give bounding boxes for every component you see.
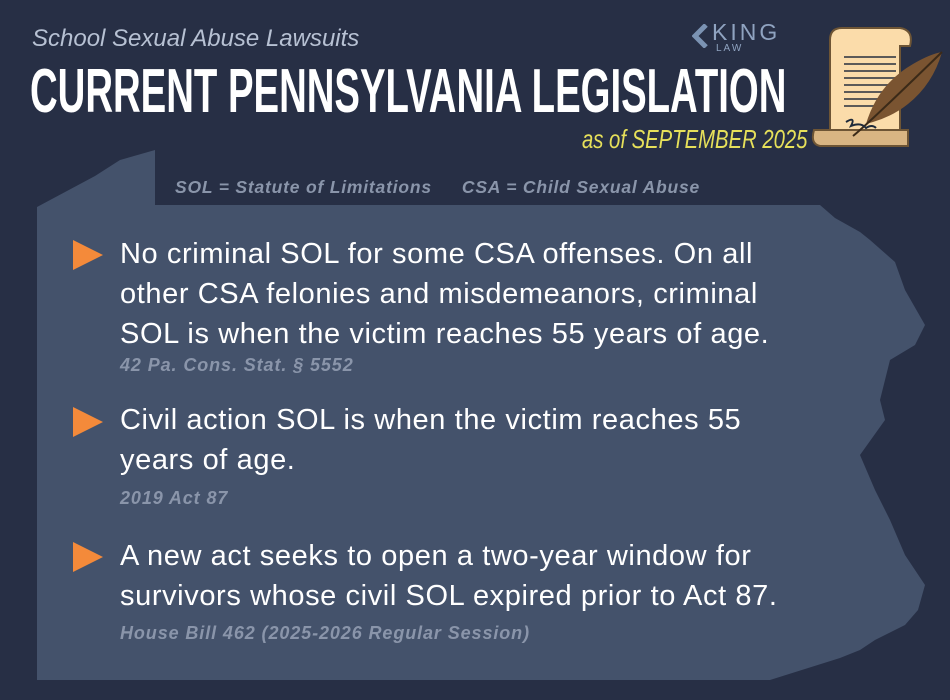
- item 2: [73, 404, 741, 508]
- logo: King Law: LAW: [716, 43, 743, 54]
- text 3: [120, 540, 778, 612]
- text 3: survivors whose civil SOL expired prior to Act 87.: [120, 580, 778, 612]
- source 3: House Bill 462 (2025-2026 Regular Session): [120, 623, 530, 643]
- text 2: years of age.: [120, 444, 295, 476]
- item 1: [73, 238, 769, 375]
- icon: orange arrow: [73, 542, 103, 572]
- text 3: A new act seeks to open a two-year window for: [120, 540, 751, 572]
- text 2: Civil action SOL is when the victim reaches 55: [120, 404, 741, 436]
- text 1: other CSA felonies and misdemeanors, criminal: [120, 278, 758, 310]
- icon: scroll with quill: [812, 27, 942, 147]
- source 1: 42 Pa. Cons. Stat. § 5552: [120, 355, 354, 375]
- text 1: No criminal SOL for some CSA offenses. On all: [120, 238, 753, 270]
- text 2: [120, 404, 741, 476]
- text 1: [120, 238, 769, 350]
- text 1: SOL is when the victim reaches 55 years of age.: [120, 318, 769, 350]
- icon: orange arrow: [73, 407, 103, 437]
- logo: King Law: KING: [712, 19, 780, 45]
- item 3: [73, 540, 778, 643]
- date: as of SEPTEMBER 2025: [582, 124, 807, 154]
- subtitle: School Sexual Abuse Lawsuits: [32, 25, 359, 52]
- icon: orange arrow: [73, 240, 103, 270]
- source 2: 2019 Act 87: [120, 488, 228, 508]
- logo: King Law: [692, 19, 780, 54]
- title: CURRENT PENNSYLVANIA LEGISLATION: [30, 57, 786, 126]
- legend: abbreviations: SOL = Statute of Limitations CSA = Child Sexual Abuse: [175, 177, 700, 197]
